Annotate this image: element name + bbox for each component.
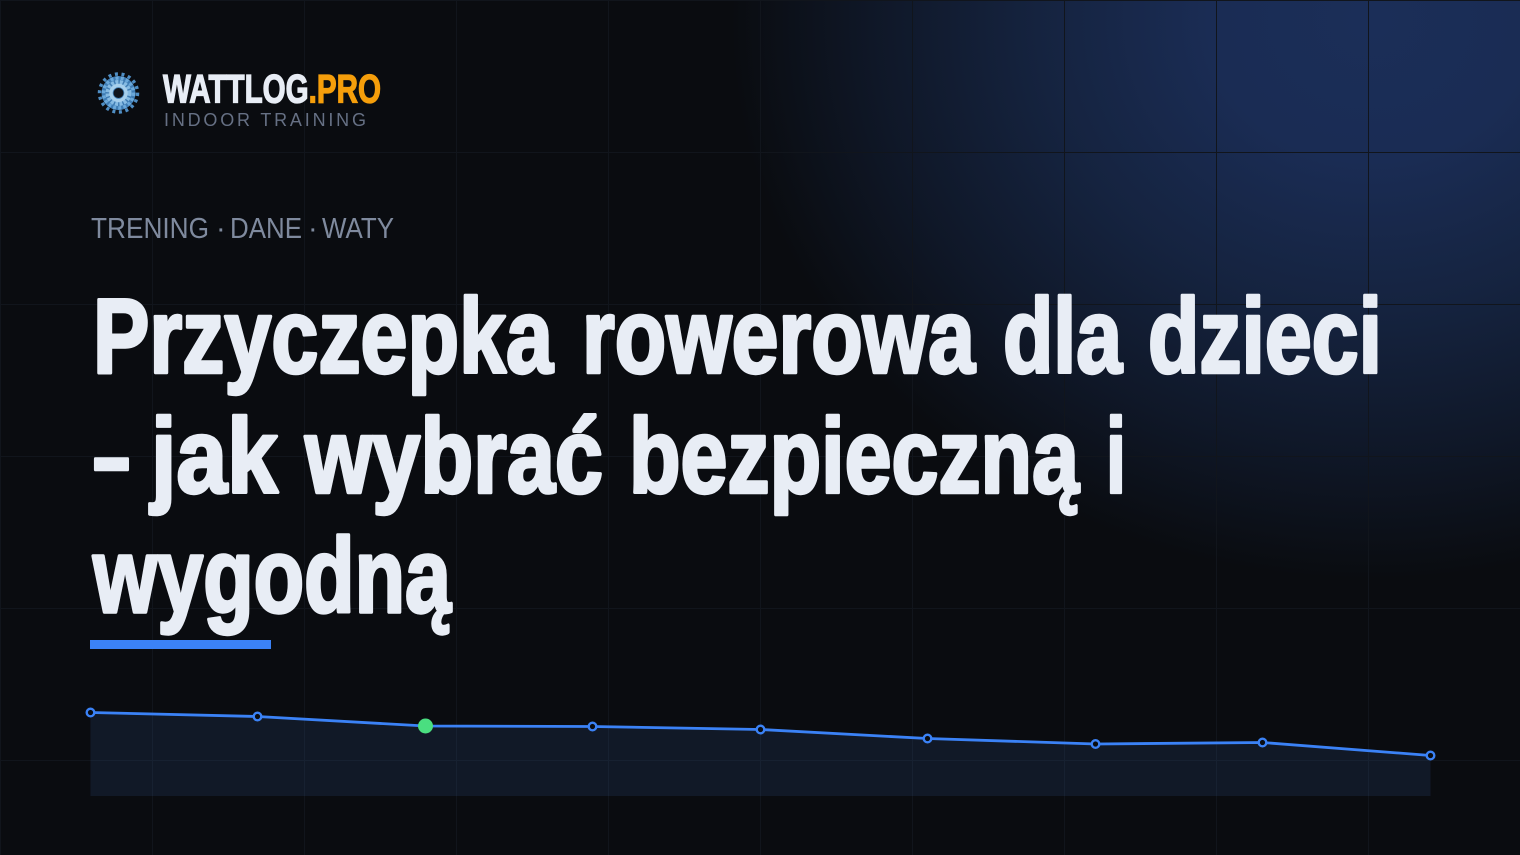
title xyxy=(92,278,1382,635)
title: rowerowa xyxy=(582,278,976,396)
title: dzieci xyxy=(1148,278,1382,396)
icon: cassette gear xyxy=(100,74,138,112)
chart area fill xyxy=(90,712,1430,796)
eyebrow: topics: · xyxy=(216,213,226,245)
title: jak xyxy=(149,398,278,516)
eyebrow: topics: WATY xyxy=(322,213,394,245)
chart points xyxy=(87,709,1434,759)
highlighted point xyxy=(418,718,433,734)
title: i xyxy=(1106,398,1126,516)
title: dla xyxy=(1003,278,1123,396)
eyebrow: topics: DANE xyxy=(230,213,302,245)
eyebrow: topics: TRENING xyxy=(91,213,209,245)
wordmark: WATTLOG.PRO xyxy=(163,68,381,112)
eyebrow: topics: · xyxy=(308,213,318,245)
title: bezpieczną xyxy=(629,398,1080,516)
logo xyxy=(100,68,381,130)
eyebrow: topics xyxy=(91,213,394,245)
title: – xyxy=(93,398,130,516)
tagline: INDOOR TRAINING xyxy=(164,110,366,130)
title underline accent xyxy=(90,640,271,649)
title: Przyczepka xyxy=(93,278,554,396)
title: wybrać xyxy=(304,398,603,516)
line chart xyxy=(87,709,1434,796)
title: wygodną xyxy=(92,517,452,635)
chart line xyxy=(90,712,1430,756)
